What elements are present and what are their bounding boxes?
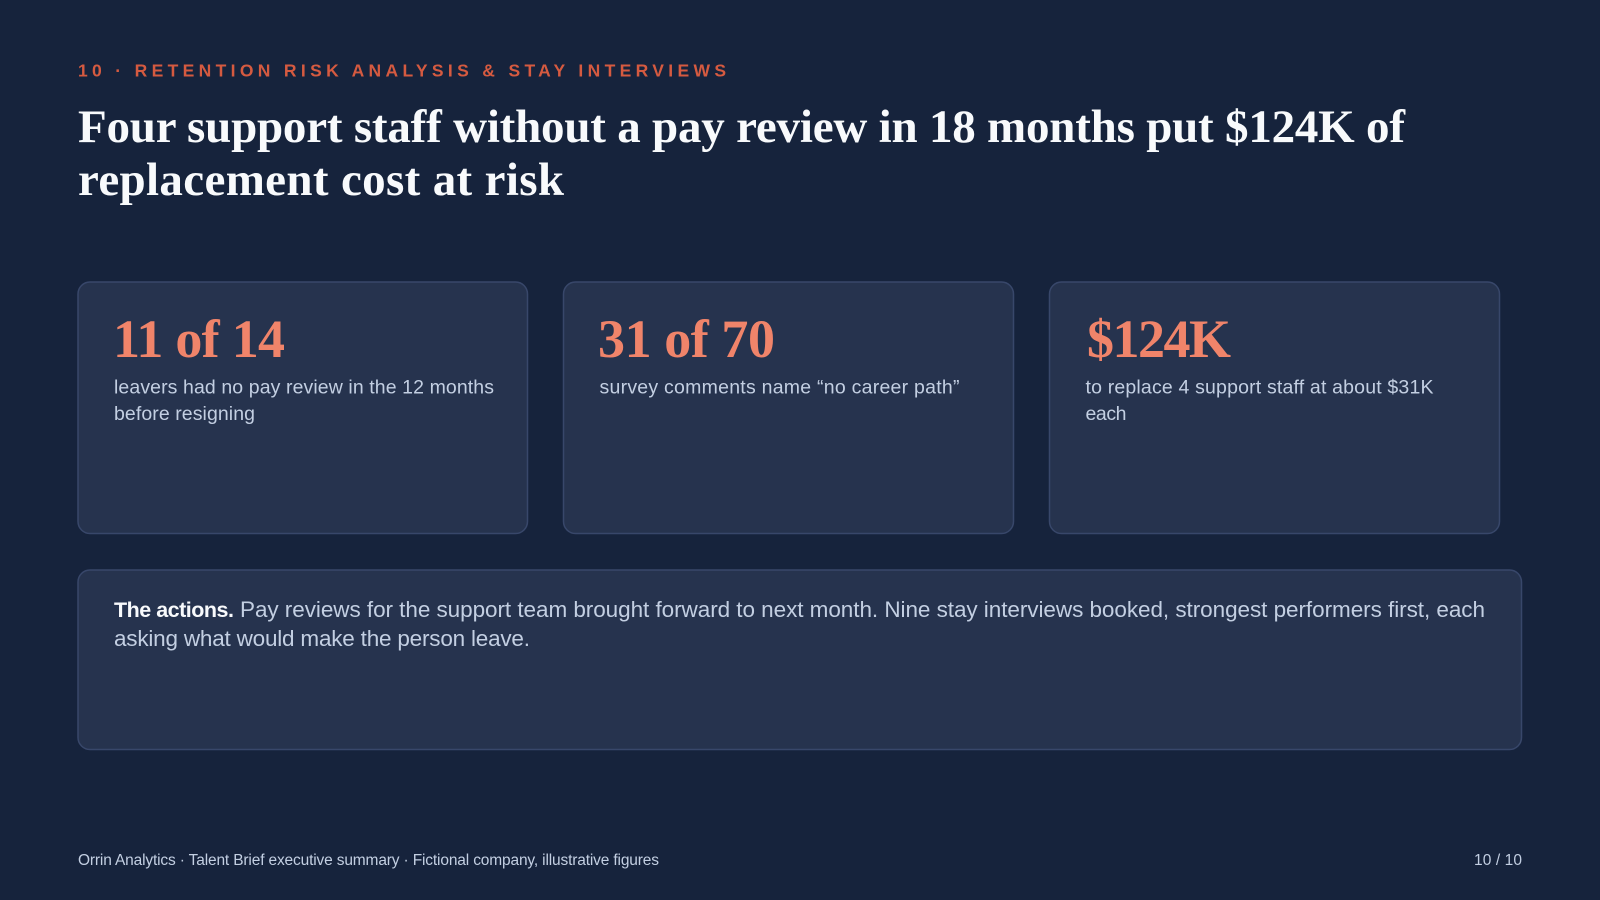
panel: replacement cost stat [1050, 282, 1500, 534]
stat description [1086, 376, 1434, 425]
stat description: survey comments name “no career path” [600, 376, 960, 398]
eyebrow: 10 · RETENTION RISK ANALYSIS & STAY INTERVIEWS [78, 60, 726, 80]
panel: the actions [78, 570, 1522, 750]
stat description: to replace 4 support staff at about $31K [1086, 376, 1434, 398]
actions text: The actions. [114, 598, 234, 622]
actions text [114, 597, 1485, 651]
actions text: asking what would make the person leave. [114, 626, 530, 651]
panel: no pay review stat [78, 282, 528, 534]
actions text: Pay reviews for the support team brought forward to next month. Nine stay interviews booked, strongest performers first, each [240, 597, 1485, 622]
page number: 10 / 10 [1474, 852, 1522, 869]
footer source note: Orrin Analytics · Talent Brief executive summary · Fictional company, illustrative figures [78, 852, 659, 869]
title [78, 101, 1406, 206]
panel: career path stat [564, 282, 1014, 534]
stat value: 11 of 14: 11 of 14 [113, 309, 285, 369]
title: Four support staff without a pay review in 18 months put $124K of [78, 101, 1406, 153]
stat description: leavers had no pay review in the 12 months [114, 376, 494, 398]
stat value: $124K: $124K [1087, 309, 1231, 369]
stat description: before resigning [114, 403, 255, 425]
stat description: each [1086, 403, 1126, 425]
title: replacement cost at risk [78, 154, 565, 206]
stat description [114, 376, 494, 425]
stat value: 31 of 70: 31 of 70 [598, 309, 775, 369]
